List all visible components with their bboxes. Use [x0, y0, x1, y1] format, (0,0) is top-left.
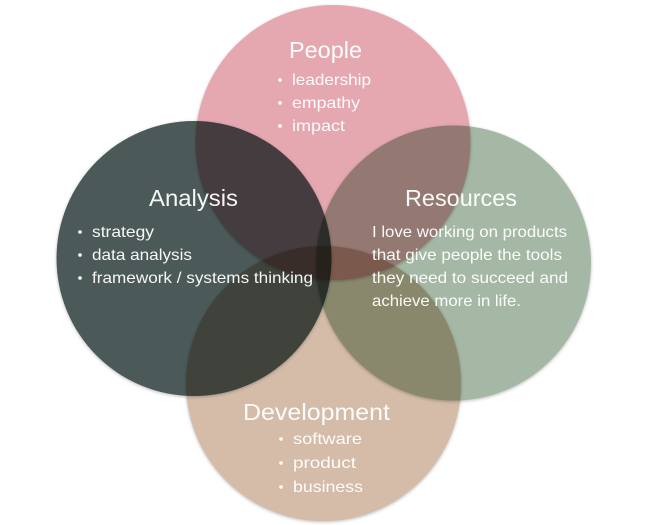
text block: development: [243, 399, 391, 496]
list: development items: business: [293, 479, 363, 496]
list: analysis items: data analysis: [92, 247, 192, 264]
paragraph: resources statement: achieve more in life.: [372, 293, 521, 310]
paragraph: resources statement: they need to succeed and: [372, 270, 568, 287]
paragraph: resources statement: [372, 224, 568, 310]
text block: analysis: [78, 185, 313, 287]
list: people items: impact: [292, 118, 346, 135]
list: development items: software: [293, 431, 362, 448]
list: people items: leadership: [292, 72, 371, 89]
heading: development: Development: [243, 399, 391, 425]
text block: resources: [372, 185, 568, 310]
heading: analysis: Analysis: [149, 185, 238, 211]
list: people items: [278, 72, 371, 135]
list: analysis items: strategy: [92, 224, 154, 241]
circle: analysis: [56, 121, 332, 396]
paragraph: resources statement: I love working on products: [372, 224, 567, 241]
circle: people: [196, 5, 470, 280]
heading: people: People: [289, 37, 362, 63]
list: development items: product: [293, 455, 357, 472]
circle: development: [186, 246, 461, 521]
list: analysis items: [78, 224, 313, 287]
paragraph: resources statement: that give people the tools: [372, 247, 562, 264]
list: development items: [279, 431, 363, 496]
circle: resources: [316, 126, 591, 400]
list: people items: empathy: [292, 95, 360, 112]
text block: people: [278, 37, 371, 135]
heading: resources: Resources: [405, 185, 517, 211]
list: analysis items: framework / systems thinking: [92, 270, 313, 287]
